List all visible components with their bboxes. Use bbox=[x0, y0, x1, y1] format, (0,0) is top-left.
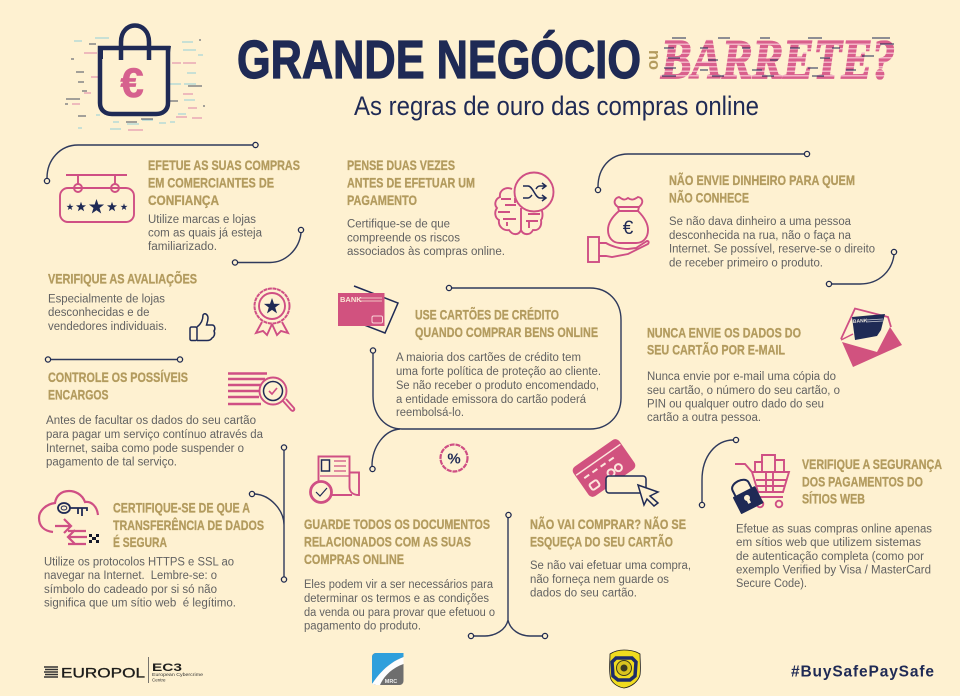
text block: transferência segura: Utilize os protocolos HTTPS e SSL ao bbox=[44, 556, 234, 568]
text block: use cartões heading and body: reembolsá-lo. bbox=[396, 407, 464, 419]
text block: controle os possíveis encargos: ENCARGOS bbox=[48, 388, 108, 402]
logo: Europol EC3: EC3 bbox=[152, 662, 182, 674]
text block: guarde todos os documentos: RELACIONADOS COM AS SUAS bbox=[304, 534, 471, 550]
text block: não envie dinheiro bbox=[669, 171, 875, 270]
logo: Europol EC3: European Cybercrime bbox=[152, 672, 204, 677]
icon: shopping bag with euro bbox=[65, 26, 205, 130]
text block: verifique as avaliações: vendedores individuais. bbox=[48, 321, 167, 333]
text block: nunca envie os dados: Nunca envie por e-mail uma cópia do bbox=[647, 371, 836, 383]
connector: bottom fork bbox=[468, 512, 548, 639]
connector: right of third block bbox=[826, 249, 897, 287]
text block: verifique as avaliações bbox=[48, 270, 197, 333]
icon: bank cards: BANK bbox=[340, 295, 362, 304]
text block: nunca envie os dados: SEU CARTÃO POR E-MAIL bbox=[647, 340, 785, 358]
text block: pense duas vezes: ANTES DE EFETUAR UM bbox=[347, 176, 475, 190]
icon: thumbs up bbox=[190, 314, 215, 340]
text block: não vai comprar: não forneça nem guarde os bbox=[530, 574, 669, 586]
icon: shopping bag with euro: € bbox=[120, 59, 144, 106]
title: BARRETE? bbox=[660, 29, 895, 91]
text block: verifique a segurança: Efetue as suas compras online apenas bbox=[736, 524, 932, 536]
logo: Europol EC3: Centre bbox=[152, 678, 166, 682]
title: GRANDE NEGÓCIO bbox=[237, 30, 641, 90]
text block: transferência segura: CERTIFIQUE-SE DE QUE A bbox=[113, 500, 250, 516]
text block: use cartões heading and body: A maioria dos cartões de crédito tem bbox=[396, 352, 581, 364]
text block: guarde todos os documentos: determinar os termos e as condições bbox=[304, 593, 489, 605]
logo: Polícia Judiciária badge bbox=[610, 650, 640, 688]
text block: não envie dinheiro: de receber primeiro o produto. bbox=[669, 258, 823, 270]
text block: não vai comprar: NÃO VAI COMPRAR? NÃO SE bbox=[530, 515, 686, 532]
text block: pense duas vezes: Certifique-se de que bbox=[347, 218, 450, 230]
text block: guarde todos os documentos: da venda ou para provar que efetuou o bbox=[304, 607, 495, 619]
text block: não vai comprar bbox=[530, 515, 691, 600]
text block: efetue as suas compras: familiarizado. bbox=[148, 241, 217, 253]
icon: credit card and cursor bbox=[571, 437, 658, 506]
text block: efetue as suas compras bbox=[148, 158, 300, 253]
text block: controle os possíveis encargos: Internet, saiba como pode suspender o bbox=[46, 443, 244, 455]
text block: transferência segura: navegar na Internet. Lembre-se: o bbox=[44, 570, 217, 582]
text block: verifique a segurança: Secure Code). bbox=[736, 578, 807, 590]
text block: não vai comprar: dados do seu cartão. bbox=[530, 588, 637, 600]
text block: controle os possíveis encargos: Antes de facultar os dados do seu cartão bbox=[46, 415, 256, 427]
icon: shopping cart and padlock bbox=[727, 455, 789, 514]
icon: rating sign with stars bbox=[60, 175, 134, 222]
text block: verifique a segurança bbox=[736, 457, 942, 590]
text block: efetue as suas compras: CONFIANÇA bbox=[148, 193, 219, 208]
icon: percent badge: % bbox=[447, 450, 461, 468]
text block: verifique a segurança: em sítios web que utilizem sistemas bbox=[736, 537, 921, 549]
icon: bank cards bbox=[338, 286, 398, 333]
text block: guarde todos os documentos: GUARDE TODOS OS DOCUMENTOS bbox=[304, 517, 490, 532]
text block: controle os possíveis encargos: para pagar um serviço contínuo através da bbox=[46, 429, 264, 441]
text block: guarde todos os documentos: Eles podem vir a ser necessários para bbox=[304, 579, 494, 591]
text block: use cartões heading and body: a entidade emissora do cartão poderá bbox=[396, 394, 587, 406]
connector: top left bbox=[44, 142, 258, 184]
panel: use cartões de crédito bbox=[370, 285, 621, 472]
icon: money bag on hand: € bbox=[623, 218, 634, 239]
logo: MRC: MRC bbox=[385, 679, 397, 685]
text block: não envie dinheiro: Se não dava dinheiro a uma pessoa bbox=[669, 216, 852, 228]
hashtag: #BuySafePaySafe bbox=[791, 664, 934, 680]
title: ou bbox=[643, 50, 662, 70]
icon: envelope with bank card bbox=[841, 308, 902, 367]
text block: nunca envie os dados: NUNCA ENVIE OS DADOS DO bbox=[647, 326, 801, 340]
text block: pense duas vezes bbox=[347, 158, 505, 258]
text block: use cartões heading and body: USE CARTÕES DE CRÉDITO bbox=[415, 306, 559, 322]
text block: pense duas vezes: PENSE DUAS VEZES bbox=[347, 158, 455, 173]
text block: use cartões heading and body: uma forte política de proteção ao cliente. bbox=[396, 366, 601, 378]
logo: Europol EC3: EUROPOL bbox=[61, 664, 145, 680]
icon: percent badge bbox=[440, 444, 468, 472]
text block: verifique as avaliações: Especialmente de lojas bbox=[48, 294, 165, 306]
icon: envelope with bank card: BANK bbox=[853, 318, 868, 325]
text block: guarde todos os documentos bbox=[304, 517, 495, 632]
logo: MRC bbox=[372, 653, 404, 685]
text block: verifique a segurança: exemplo Verified by Visa / MasterCard bbox=[736, 564, 931, 576]
text block: verifique as avaliações: VERIFIQUE AS AVALIAÇÕES bbox=[48, 270, 197, 286]
text block: verifique a segurança: DOS PAGAMENTOS DO bbox=[802, 474, 923, 490]
text block: verifique a segurança: de autenticação completa (como por bbox=[736, 551, 924, 563]
text block: nunca envie os dados: seu cartão, o número do seu cartão, o bbox=[647, 385, 840, 397]
text block: controle os possíveis encargos bbox=[46, 369, 264, 468]
text block: efetue as suas compras: EFETUE AS SUAS COMPRAS bbox=[148, 158, 300, 173]
text block: guarde todos os documentos: COMPRAS ONLINE bbox=[304, 552, 404, 567]
text block: nunca envie os dados bbox=[647, 326, 840, 424]
text block: transferência segura: significa que um sítio web é legítimo. bbox=[44, 598, 236, 610]
connector: horizontal above encargos bbox=[45, 357, 183, 362]
text block: controle os possíveis encargos: pagamento de tal serviço. bbox=[46, 456, 177, 468]
text block: efetue as suas compras: com as quais já esteja bbox=[148, 228, 263, 240]
icon: cloud with key and arrows bbox=[39, 491, 99, 544]
icon: money bag on hand bbox=[588, 197, 649, 262]
connector: right centre curve bbox=[699, 437, 739, 508]
text block: use cartões heading and body: QUANDO COMPRAR BENS ONLINE bbox=[415, 325, 598, 340]
text block: controle os possíveis encargos: CONTROLE OS POSSÍVEIS bbox=[48, 369, 188, 385]
text block: pense duas vezes: associados às compras online. bbox=[347, 246, 505, 258]
connector: vertical between left and bottom centre bbox=[249, 445, 287, 582]
logo: Europol EC3 bbox=[44, 657, 204, 683]
text block: não vai comprar: ESQUEÇA DO SEU CARTÃO bbox=[530, 532, 673, 550]
text block: transferência segura: É SEGURA bbox=[113, 534, 167, 550]
text block: guarde todos os documentos: pagamento do produto. bbox=[304, 620, 421, 632]
subtitle: As regras de ouro das compras online bbox=[354, 91, 759, 121]
text block: não vai comprar: Se não vai efetuar uma compra, bbox=[530, 560, 691, 572]
text block: verifique a segurança: SÍTIOS WEB bbox=[802, 490, 865, 506]
text block: verifique as avaliações: desconhecidas e de bbox=[48, 307, 150, 319]
icon: award ribbon bbox=[254, 288, 290, 335]
text block: não envie dinheiro: Internet. Se possível, reserve-se o direito bbox=[669, 244, 875, 256]
text block: use cartões heading and body bbox=[396, 306, 601, 419]
text block: pense duas vezes: PAGAMENTO bbox=[347, 193, 417, 208]
text block: nunca envie os dados: cartão a outra pessoa. bbox=[647, 412, 761, 424]
text block: efetue as suas compras: EM COMERCIANTES DE bbox=[148, 176, 274, 190]
connector: right of first block bbox=[232, 227, 304, 265]
text block: não envie dinheiro: desconhecida na rua, não o faça na bbox=[669, 230, 852, 242]
text block: use cartões heading and body: Se não receber o produto encomendado, bbox=[396, 380, 599, 392]
text block: não envie dinheiro: NÃO CONHECE bbox=[669, 188, 749, 206]
text block: transferência segura: símbolo do cadeado por si só não bbox=[44, 584, 217, 596]
connector: top right bbox=[595, 151, 810, 193]
text block: transferência segura bbox=[44, 500, 264, 610]
icon: magnifier over striped document bbox=[228, 374, 294, 411]
icon: documents with check bbox=[310, 456, 359, 502]
text block: transferência segura: TRANSFERÊNCIA DE DADOS bbox=[113, 516, 264, 533]
icon: brain and shuffle bbox=[495, 172, 554, 234]
text block: pense duas vezes: compreende os riscos bbox=[347, 232, 460, 244]
text block: efetue as suas compras: Utilize marcas e lojas bbox=[148, 214, 256, 226]
text block: não envie dinheiro: NÃO ENVIE DINHEIRO PARA QUEM bbox=[669, 171, 855, 188]
text block: nunca envie os dados: PIN ou qualquer outro dado do seu bbox=[647, 398, 824, 410]
